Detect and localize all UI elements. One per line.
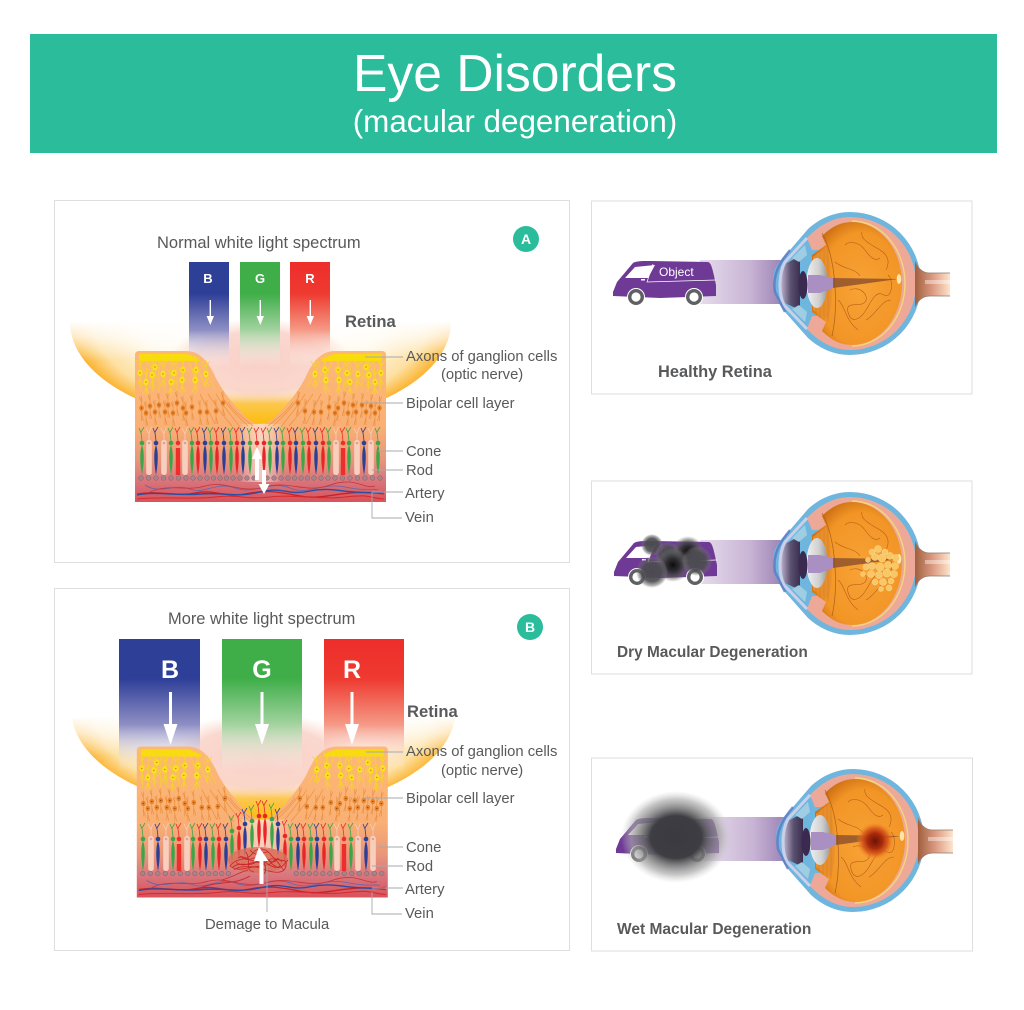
badge A: A — [521, 231, 531, 247]
light bar: blue: B — [203, 271, 213, 286]
van object obscured — [614, 541, 717, 586]
labels B: Vein — [405, 906, 434, 922]
cones and rods B — [140, 800, 376, 871]
panel: wet macular degeneration — [592, 758, 972, 951]
badge B — [517, 614, 543, 640]
retina label: Retina — [345, 312, 396, 331]
van object obscured: Object — [662, 822, 697, 836]
light bar: green: G — [255, 271, 265, 286]
labels A: Bipolar cell layer — [406, 396, 515, 412]
labels A: Axons of ganglion cells — [406, 349, 557, 365]
labels B — [205, 744, 557, 933]
retina cross-section B — [137, 746, 388, 898]
eye diagram wet — [703, 769, 953, 912]
labels A — [405, 349, 557, 526]
retina bowl B — [70, 713, 457, 820]
labels B: Axons of ganglion cells — [406, 744, 557, 760]
light bar: blue — [119, 639, 200, 771]
title: Eye Disorders — [353, 44, 677, 102]
eye diagram dry — [700, 492, 950, 635]
caption: Dry Macular Degeneration — [617, 644, 808, 661]
light bar: green — [240, 262, 280, 367]
retina bowl A — [68, 318, 453, 424]
header banner — [30, 34, 997, 153]
caption: Wet Macular Degeneration — [617, 921, 811, 938]
dark blot — [621, 791, 731, 883]
labels A: Rod — [406, 463, 433, 479]
labels B: Artery — [405, 882, 445, 898]
subtitle: (macular degeneration) — [353, 104, 677, 139]
retinal bleed — [856, 822, 894, 860]
caption: Healthy Retina — [658, 363, 773, 381]
van object obscured: Object — [660, 545, 695, 559]
leader lines B — [267, 752, 403, 914]
panel B heading: More white light spectrum — [168, 610, 355, 628]
light bar: red — [290, 262, 330, 367]
labels A: Artery — [405, 486, 445, 502]
labels B: Cone — [406, 840, 441, 856]
labels B: Demage to Macula — [205, 917, 330, 933]
light bar: green: G — [252, 656, 272, 684]
labels B: Rod — [406, 859, 433, 875]
labels A: (optic nerve) — [441, 367, 523, 383]
panel A heading: Normal white light spectrum — [157, 234, 361, 252]
panel A: normal white light spectrum — [54, 200, 570, 562]
panel B: more white light spectrum — [54, 588, 570, 950]
macula arrow B — [254, 847, 268, 884]
light bar: red — [324, 639, 404, 771]
light bar: red: R — [305, 271, 315, 286]
leader lines A — [362, 357, 403, 518]
light bar: red: R — [343, 656, 361, 684]
dark spots — [636, 534, 712, 588]
panel: dry macular degeneration — [592, 481, 972, 674]
drusen deposits — [860, 546, 900, 592]
retina cross-section A — [135, 351, 386, 502]
light bar: blue: B — [161, 656, 179, 684]
labels A: Vein — [405, 510, 434, 526]
van object — [613, 261, 716, 306]
labels A: Cone — [406, 444, 441, 460]
labels B: Bipolar cell layer — [406, 791, 515, 807]
macula damage tangle — [200, 847, 288, 888]
van object obscured — [616, 818, 719, 863]
van object: Object — [659, 265, 694, 279]
light bar: green — [222, 639, 302, 771]
light bar: blue — [189, 262, 229, 367]
cones and rods A — [139, 427, 380, 475]
badge A — [513, 226, 539, 252]
badge B: B — [525, 619, 535, 635]
eye diagram healthy — [700, 212, 950, 355]
retina label: Retina — [407, 702, 458, 721]
panel: healthy retina — [592, 201, 972, 394]
labels B: (optic nerve) — [441, 763, 523, 779]
macula arrows A — [252, 446, 270, 494]
